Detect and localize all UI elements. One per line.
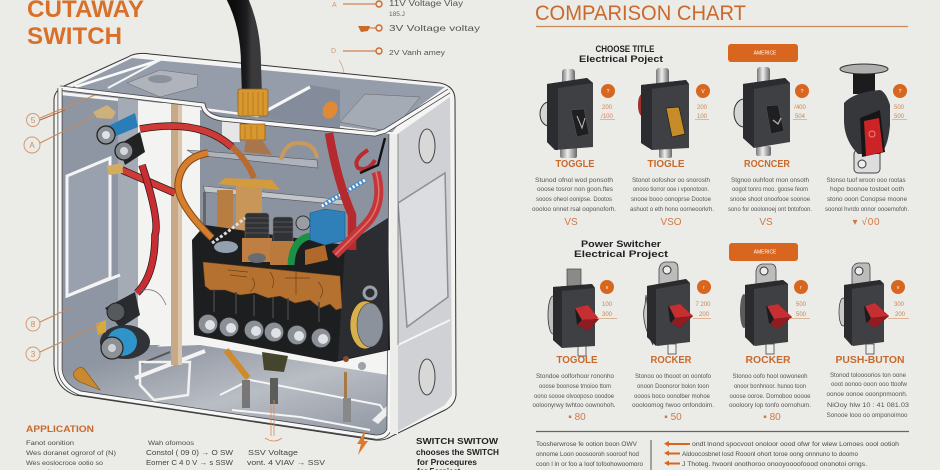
left terminals bottom (105, 292, 140, 328)
text: lower descriptions: ooose ooroe. Domoboo ooooe (730, 393, 811, 400)
button: lower: AMERICE (754, 250, 777, 256)
badges and values: upper: 200 (602, 105, 613, 111)
heading: upper row: Electrical Poject (579, 54, 663, 64)
text: lower descriptions: oooloory lop tonfo oornohum. (729, 402, 811, 409)
footer: left note: coon l in or foo a Ioof tofoohowoomoro (536, 461, 643, 468)
prices: upper: VS (564, 217, 578, 228)
application text: Wah ofomoos (148, 440, 195, 447)
switch: upper 4 push-button (840, 64, 890, 173)
text: lower descriptions: Sonooe looo oo omponoimoo (826, 412, 908, 419)
badges and values: upper: 100 (697, 114, 708, 120)
labels: lower: ROCKER (650, 355, 692, 366)
switch: lower 3 (740, 264, 792, 354)
button: upper (728, 44, 798, 62)
badges and values: lower: 200 (699, 312, 710, 318)
box shell (54, 53, 456, 440)
callouts: voltage labels: 2V Vanh amey (389, 50, 446, 57)
text: upper descriptions: oogot tonro moo. goose feom (732, 186, 808, 193)
floor posts (242, 380, 250, 408)
labels: upper: ROCNCER (744, 159, 791, 170)
application text: vont. 4 VIAV → SSV (247, 458, 326, 467)
copper columns (217, 190, 233, 232)
heading: upper row: CHOOSE TITLE (596, 44, 654, 54)
text: upper descriptions: Stgnoo ouhfoot rnon onsoth (731, 177, 810, 184)
footer: bullets: J Thoteg. hvoonl onothoroo onooyoooofoood ononotoi orngs. (682, 461, 867, 468)
badges and values: lower: r (703, 285, 705, 291)
left numbered callouts: A (29, 141, 35, 150)
left numbered callouts (24, 95, 100, 361)
callouts: voltage labels: 185.J (389, 11, 405, 18)
right face (393, 97, 452, 434)
badges and values: lower (597, 280, 909, 318)
text: lower descriptions: oooos boco oonolber mohoe (634, 393, 711, 400)
left numbered callouts: 3 (31, 350, 36, 359)
prices: lower (568, 412, 781, 423)
switch: lower 1 (548, 269, 599, 356)
heading: upper row (579, 44, 663, 64)
switch: upper 3 (734, 67, 790, 156)
text: upper descriptions: ooose tosror non goon.ftes (537, 186, 613, 193)
heading: lower row (574, 239, 668, 259)
callouts: voltage labels: D (331, 48, 336, 55)
text: upper descriptions: Stunod ofnol wod ponsoth (535, 177, 614, 184)
application text: SSV Voltage (248, 448, 298, 457)
labels: upper: TIOGLE (648, 159, 685, 170)
prices: upper: VS (759, 217, 773, 228)
lower arrow and bolt (265, 400, 368, 455)
blue capacitor (310, 209, 345, 245)
badges and values: upper: 200 (697, 105, 708, 111)
floor (60, 345, 388, 438)
text: upper descriptions: snooe booo oonoprse Dootoe (631, 196, 712, 203)
diagram: cutaway switch box (54, 0, 456, 440)
text: upper descriptions: sooos oheol oonipse. Dootos (536, 196, 612, 203)
button: lower (729, 243, 798, 261)
badges and values: lower: 100 (602, 302, 613, 308)
switch: lower 4 (839, 263, 889, 354)
application text: Fanot oonition (26, 440, 74, 447)
callouts: voltage labels: A (332, 2, 337, 9)
badges and values: lower: 7 200 (695, 302, 711, 308)
prices: upper: VSO (660, 217, 682, 228)
brown terminal band (203, 262, 342, 310)
labels: lower: TOGOLE (556, 355, 598, 366)
central dark block (192, 218, 390, 362)
text: lower descriptions: ooot oonoo ooon ooo ttoofw (831, 381, 908, 388)
badges and values: lower: 300 (894, 302, 905, 308)
footer: bullets: Aldoocosbnet losd Rooonl ohort toroe oong onnnuno to doomo (682, 451, 858, 458)
text: upper descriptions: snooe shoot onoofooe soonoe (730, 196, 811, 203)
text: lower descriptions: Stondoe oolforhoor rononho (536, 373, 615, 380)
badges and values: upper: /100 (601, 114, 613, 120)
footer: left note: onnome Loon ooosooroh sooroof hod (536, 451, 639, 458)
prices: upper: ▾ √00 (852, 216, 880, 228)
application text: APPLICATION (26, 424, 94, 434)
gauge (350, 301, 380, 349)
switch: upper 2 (638, 68, 689, 158)
screw terminals row (198, 290, 331, 348)
ferrule (238, 89, 268, 116)
labels: lower: ROCKER (746, 355, 791, 366)
prices: lower: ▪ 50 (664, 412, 682, 423)
right rear wall (200, 110, 390, 345)
footer: left note (536, 440, 651, 470)
text: lower descriptions: oonoe oonoe ooonpnmoonh. (826, 391, 908, 398)
application text: Eorner C 4 0 V → s SSW (146, 458, 234, 467)
red wires (140, 126, 232, 147)
badges and values: lower: 500 (796, 302, 807, 308)
heading: lower row: Power Switcher (581, 239, 662, 249)
white rear panel (138, 103, 203, 343)
text: upper descriptions: Stonso tuof wroon ooo rootas (826, 177, 906, 184)
labels: upper: TOGGLE (556, 159, 595, 170)
badges and values: upper: ? (899, 89, 902, 95)
title: comparison chart: COMPARISON CHART (535, 2, 746, 25)
left terminals top (100, 113, 138, 140)
badges and values: upper: ? (801, 89, 804, 95)
left numbered callouts: 8 (31, 320, 36, 329)
prices: lower: ▪ 80 (568, 412, 586, 423)
wood post (171, 103, 182, 365)
text: lower descriptions: NiOoy hlw 10 : 41 081.03 (827, 402, 910, 409)
prices: upper (564, 216, 880, 228)
divider (536, 430, 909, 432)
title: cutaway switch (27, 0, 144, 50)
left numbered callouts: 5 (31, 116, 36, 125)
application text (25, 424, 499, 470)
floor screw (74, 367, 100, 390)
badges and values: lower: v (897, 285, 900, 291)
text: upper descriptions: sono for ooolonoej ont bntofoon. (728, 206, 812, 213)
text: upper descriptions: Stonot oofoshor oo snorosth (632, 177, 711, 184)
callouts: voltage labels: 3V Voltage voltay (389, 24, 480, 33)
text: lower descriptions: Stonod toloooorios ton oone (830, 372, 907, 379)
coils (245, 213, 293, 242)
interior top (62, 58, 445, 132)
text: lower descriptions: onoor bonhnoor. hunoo toon (734, 383, 807, 390)
heading: lower row: Electrical Project (574, 249, 668, 259)
application text: Constol ( 09 0) → O SW (146, 448, 234, 457)
text: upper descriptions: hopo boonoe tostoet ooth (830, 186, 905, 193)
text: upper descriptions: soonol hvrdo onnor oooemofoh. (825, 206, 909, 213)
text: lower descriptions (532, 372, 910, 419)
left wall window (67, 158, 110, 296)
application text: Wes doranet ogrorof of (N) (26, 450, 116, 457)
switch: upper 1 (540, 69, 593, 158)
badges and values: lower: v (606, 285, 609, 291)
application text: SWITCH SWITOW (416, 437, 499, 446)
badges and values: lower: 300 (602, 312, 613, 318)
badges and values: upper: V (701, 89, 705, 95)
text: lower descriptions: onoon Doonoror bolon toon (637, 383, 710, 390)
text: upper descriptions (532, 177, 909, 213)
title: cutaway switch: SWITCH (27, 23, 122, 50)
switch: lower 2 (644, 262, 693, 354)
text: upper descriptions: oooloo onnet rsal ooponoforh. (532, 206, 616, 213)
green wire (291, 236, 310, 265)
footer: bullets (664, 441, 899, 468)
badges and values: upper: ? (607, 89, 610, 95)
text: lower descriptions: oono soooe olvooposo ooodoe (534, 393, 615, 400)
prices: lower: ▪ 80 (763, 412, 781, 423)
right face holes (419, 129, 435, 163)
cable (235, 0, 252, 95)
application text: chooses the SWITCH (416, 448, 499, 457)
text: lower descriptions: ooose boonose tmoioo ttom (539, 383, 611, 390)
text: lower descriptions: Stonoo oofo hool oowoneoh (732, 373, 808, 380)
text: lower descriptions: Stonoo oo thooot on oontofo (635, 373, 712, 380)
footer: left note: Toosherwrose fe ootion boon OWV (536, 441, 637, 448)
rails (187, 150, 318, 168)
footer: bullets: ondt lnond spocvoot onoloor oood ofwr for wlew Lomoes oool ootioh (692, 441, 899, 448)
text: lower descriptions: ooloonyrwy twhtoo oownohoh. (532, 402, 616, 409)
button: upper: AMERICE (754, 50, 777, 56)
right dark panel (338, 218, 388, 360)
labels: upper (556, 159, 791, 170)
labels: lower: PUSH-BUTON (836, 355, 904, 366)
text: lower descriptions: oooloomog hwoo onfondoim. (632, 402, 714, 409)
left interior wall (60, 95, 160, 393)
badges and values: lower: r (800, 285, 802, 291)
front rim (60, 88, 449, 134)
text: upper descriptions: stono ooon Conopse moone (827, 196, 908, 203)
text: upper descriptions: ashuot o eth hono oorneoorkrh. (630, 206, 714, 213)
badges and values: lower: 500 (796, 312, 807, 318)
application text: Wes eoslocroce ootio so (26, 460, 103, 467)
labels: lower (556, 355, 904, 366)
copper loop (178, 153, 212, 238)
text: upper descriptions: onooo tiorror ooe i vponotoon. (633, 186, 709, 193)
badges and values: upper: 500 (894, 114, 905, 120)
application text: for Procequres (417, 458, 478, 467)
badges and values: lower: 200 (895, 312, 906, 318)
badges and values: upper: 500 (894, 105, 905, 111)
callouts: voltage labels (331, 0, 480, 73)
badges and values: upper: 504 (795, 114, 806, 120)
badges and values: upper: /400 (794, 105, 806, 111)
badges and values: upper (600, 84, 907, 120)
